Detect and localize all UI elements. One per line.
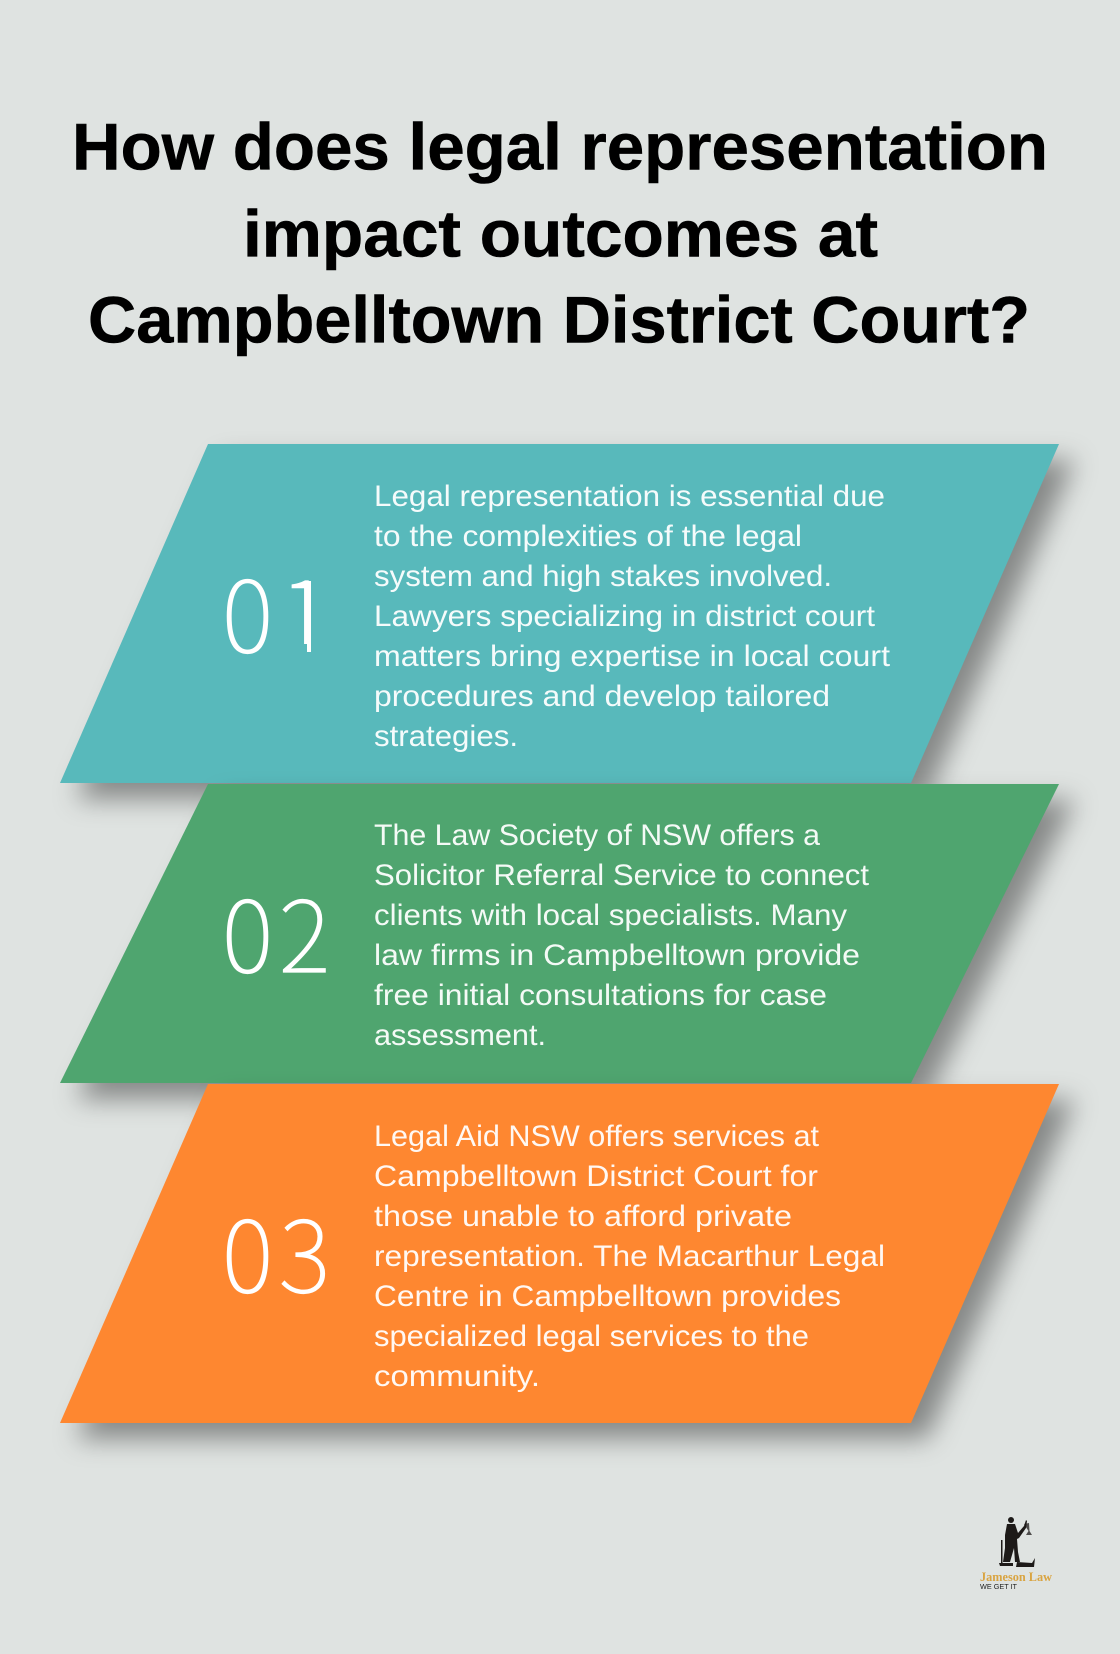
text block 01: to the complexities of the legal [374,520,802,553]
panel: step 01 [60,444,1075,799]
text block 03: specialized legal services to the [374,1320,809,1353]
panel: step 02 [60,784,1075,1099]
text block 03: community. [374,1360,540,1393]
text block 02: clients with local specialists. Many [374,899,847,932]
number 02: 02 [222,859,330,1001]
text block 01 [374,480,891,753]
text block 02: The Law Society of NSW offers a [374,819,820,852]
panel 03 shape [60,1084,1059,1423]
panel: step 03 [60,1084,1075,1439]
title: How does legal representation [72,110,1048,184]
text block 01: Legal representation is essential due [374,480,885,513]
text block 02: Solicitor Referral Service to connect [374,859,870,892]
number 03: 03 [222,1179,330,1321]
text block 02: free initial consultations for case [374,979,827,1012]
text block 01: system and high stakes involved. [374,560,832,593]
title: impact outcomes at [243,196,878,270]
text block 03: Centre in Campbelltown provides [374,1280,841,1313]
text block 03: representation. The Macarthur Legal [374,1240,885,1273]
text block 02: assessment. [374,1019,546,1052]
logo name: Jameson Law [980,1570,1052,1584]
text block 03: Campbelltown District Court for [374,1160,818,1193]
text block 01: procedures and develop tailored [374,680,830,713]
title: Campbelltown District Court? [88,282,1030,356]
text block 03: those unable to afford private [374,1200,792,1233]
panel 02 shape [60,784,1059,1083]
text block 01: matters bring expertise in local court [374,640,891,673]
panel 01 shape [60,444,1059,783]
text block 03 [374,1120,885,1393]
text block 02: law firms in Campbelltown provide [374,939,860,972]
logo: Jameson Law [980,1517,1052,1591]
title [72,110,1048,356]
text block 01: strategies. [374,720,518,753]
logo tagline: WE GET IT [980,1584,1018,1591]
text block 01: Lawyers specializing in district court [374,600,876,633]
icon: lady justice [999,1517,1035,1567]
text block 03: Legal Aid NSW offers services at [374,1120,820,1153]
number 01: 01 [222,539,330,681]
text block 02 [374,819,870,1052]
